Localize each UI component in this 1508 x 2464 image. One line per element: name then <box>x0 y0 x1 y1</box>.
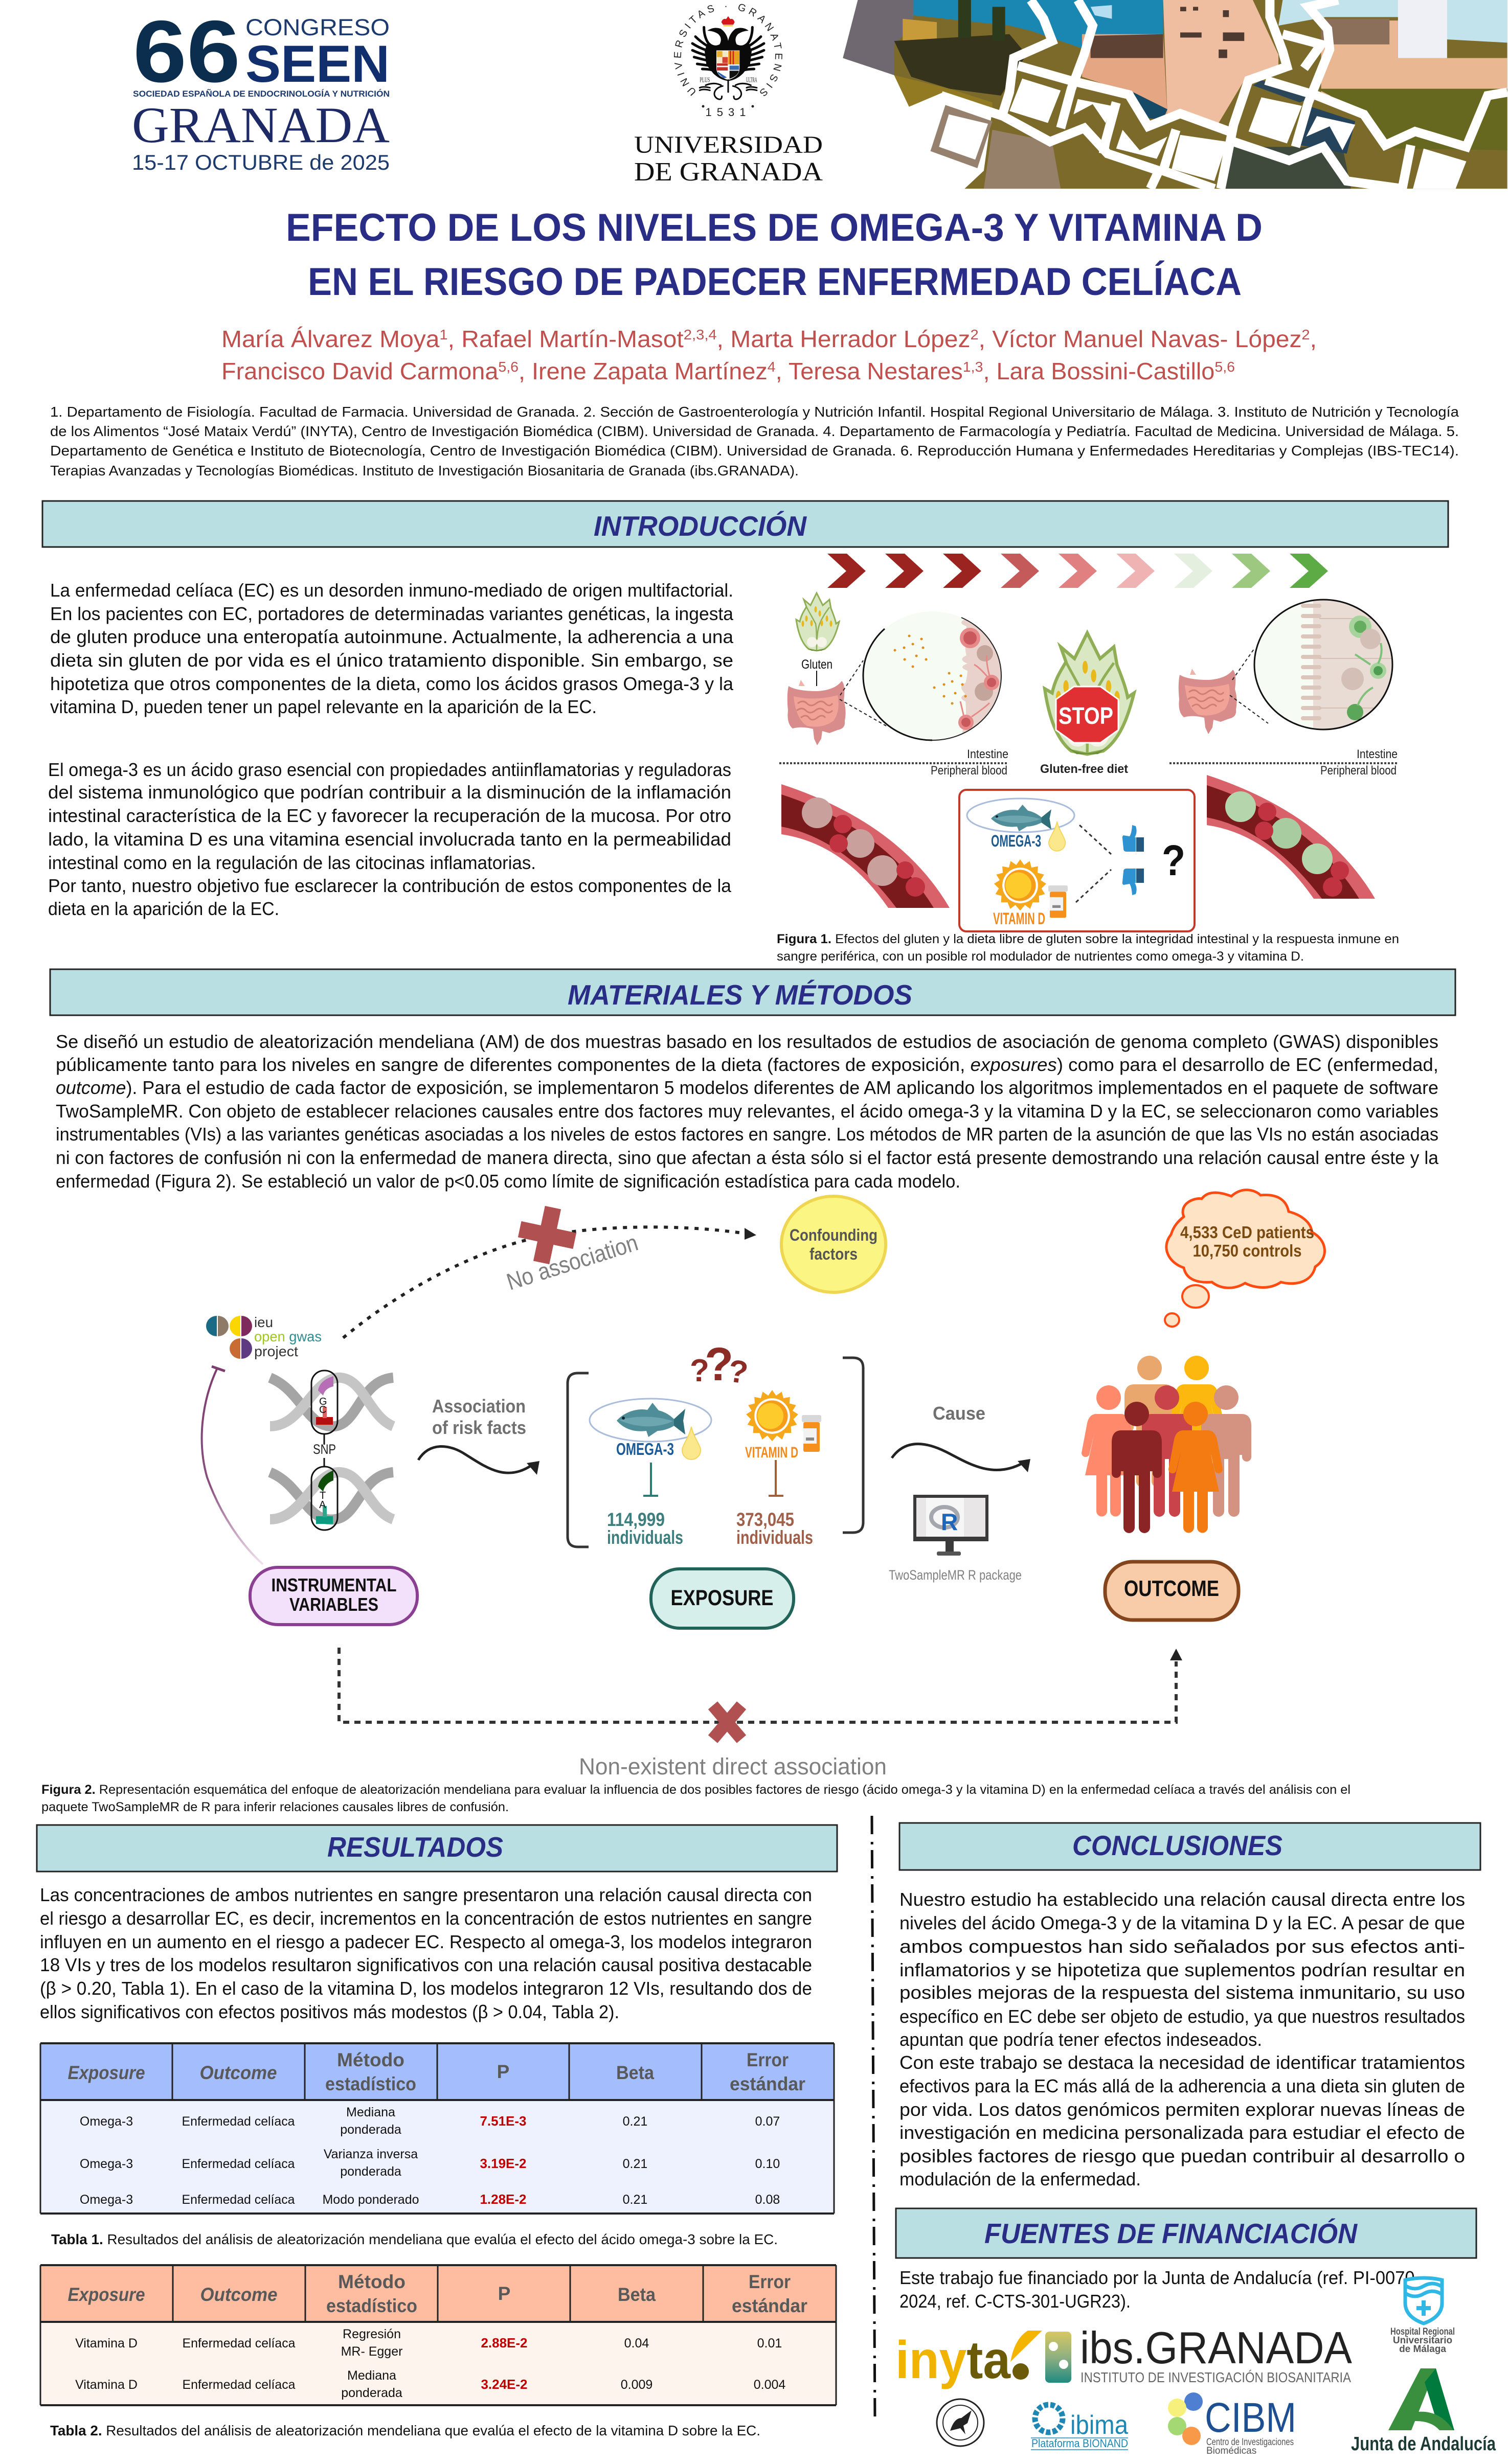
text: introducción paragraph 1: La enfermedad celíaca (EC) es un desorden inmuno-mediado de origen multifactorial. <box>50 580 733 601</box>
text: introducción paragraph 2: lado, la vitamina D es una vitamina esencial involucrada tanto en la permeabilidad <box>48 829 731 850</box>
callout: sample size cloud <box>1165 1190 1324 1327</box>
pill: instrumental variables <box>250 1567 417 1625</box>
text: introducción paragraph 1: En los pacientes con EC, portadores de determinadas variantes genéticas, la ingesta <box>50 603 734 624</box>
table 2: vitamina d: Error <box>749 2271 791 2292</box>
header image: Alhambra collage <box>843 0 1507 189</box>
arrow: non-existent direct association <box>339 1648 1182 1722</box>
authors: , Rafael Martín-Masot <box>448 326 684 352</box>
icon: fish omega-3 <box>590 1399 711 1459</box>
question marks <box>690 1338 750 1391</box>
logo: inyta: inyta <box>895 2331 1011 2390</box>
text: conclusiones: inflamatorios y se hipotetiza que suplementos podrían resultar en <box>899 1959 1465 1980</box>
logo: ibima plataforma bionand: Plataforma BIONAND <box>1031 2437 1128 2450</box>
bracket: exposure left <box>568 1373 589 1547</box>
authors: 4 <box>768 359 776 375</box>
table 2: vitamina d: P <box>498 2283 510 2304</box>
icon: dna snp G C <box>270 1371 393 1434</box>
icon: dna snp T A: T <box>320 1490 326 1501</box>
logo: 66 congreso SEEN Granada: CONGRESO <box>245 14 390 40</box>
callout: sample size cloud: 10,750 controls <box>1192 1241 1302 1260</box>
table 1: omega-3: Método <box>337 2049 404 2070</box>
pill: outcome <box>1105 1562 1239 1620</box>
caption: figura 2 <box>41 1783 1351 1814</box>
text: introducción paragraph 1: vitamina D, pueden tener un papel relevante en la aparición de la EC. <box>50 696 597 717</box>
question marks: ? <box>705 1338 733 1390</box>
authors: , Teresa Nestares <box>776 358 963 384</box>
figure 1: gluten diagram <box>779 554 1400 931</box>
figure 2: mendelian randomization diagram <box>202 1190 1324 1779</box>
text: conclusiones: Nuestro estudio ha establecido una relación causal directa entre los <box>899 1889 1465 1910</box>
table 2: vitamina d: Outcome <box>200 2284 277 2305</box>
text: introducción paragraph 1: dieta sin gluten de por vida es el único tratamiento disponible. Sin embargo, se <box>50 650 733 671</box>
logo: 66 congreso SEEN Granada <box>132 3 390 174</box>
table 1: omega-3: estadístico <box>325 2073 416 2094</box>
arrow: no association dashed curve <box>343 1227 756 1338</box>
text: conclusiones: efectivos para la EC más allá de la adherencia a una dieta sin gluten de <box>899 2075 1465 2096</box>
table 1: omega-3: Omega-3 <box>80 2114 133 2129</box>
logo: cibm: Centro de Investigaciones <box>1206 2437 1294 2448</box>
text: financiación <box>899 2267 1421 2312</box>
table 1: omega-3: Modo ponderado <box>322 2193 419 2207</box>
question mark: ? <box>1162 836 1185 884</box>
zoom: inflamed intestine wall <box>840 611 1007 741</box>
logo: Universidad de Granada <box>634 4 823 187</box>
logo: cibm <box>1168 2392 1296 2456</box>
text: resultados <box>40 1884 812 2022</box>
logo: cibm: Biomédicas <box>1206 2446 1256 2456</box>
text: conclusiones: por vida. Los datos genómicos permiten explorar nuevas líneas de <box>899 2099 1465 2120</box>
text: conclusiones: Con este trabajo se destaca la necesidad de identificar tratamientos <box>899 2052 1465 2073</box>
icon: dna snp G C: G <box>319 1396 327 1407</box>
table 1: omega-3: 0.21 <box>623 2193 647 2207</box>
pill: instrumental variables: VARIABLES <box>289 1594 378 1615</box>
icon: monitor with R: R <box>941 1509 958 1535</box>
caption: figura 1 <box>777 932 1399 964</box>
text: materiales y métodos: enfermedad (Figura 2). Se estableció un valor de p<0.05 como límite de significación estadística para cada modelo. <box>56 1171 960 1192</box>
callout: confounding factors: factors <box>809 1245 858 1263</box>
logo: Universidad de Granada: ULTRA <box>746 76 757 84</box>
text: materiales y métodos: outcome). Para el estudio de cada factor de exposición, se implementaron 5 modelos diferentes de AM aplicando los algoritmos implementados en el paquete de software <box>56 1077 1438 1098</box>
table 2: vitamina d: Vitamina D <box>75 2336 138 2351</box>
text: conclusiones: ambos compuestos han sido señalados por sus efectos anti- <box>899 1936 1465 1957</box>
table 2: vitamina d: Exposure <box>67 2284 145 2305</box>
divider and labels: intestine vs peripheral blood: Intestine <box>967 747 1008 761</box>
callout: sample size cloud: 4,533 CeD patients <box>1180 1223 1314 1242</box>
text: introducción paragraph 1: de gluten produce una enteropatía autoinmune. Actualmente, la adherencia a una <box>50 626 734 647</box>
table 1: omega-3: P <box>497 2061 509 2082</box>
text: financiación: 2024, ref. C-CTS-301-UGR23). <box>899 2291 1131 2312</box>
label: association of risk facts: of risk facts <box>432 1417 526 1438</box>
icon: red cross <box>713 1705 741 1739</box>
pill: outcome: OUTCOME <box>1124 1576 1219 1601</box>
logo: Universidad de Granada: DE GRANADA <box>634 157 823 187</box>
table 2: vitamina d: ponderada <box>341 2386 402 2400</box>
text: resultados: (β > 0.20, Tabla 1). En el caso de la vitamina D, los modelos integraron 12 VIs, resultando dos de <box>40 1978 812 1999</box>
table 1: omega-3: Error <box>747 2049 789 2070</box>
table 1: omega-3: 0.10 <box>755 2157 780 2171</box>
text: introducción paragraph 2: dieta en la aparición de la EC. <box>48 898 279 919</box>
icon: pill bottle <box>1048 885 1068 918</box>
table 2: vitamina d: estadístico <box>326 2295 417 2316</box>
icon: sun vitamin d <box>746 1390 798 1441</box>
authors: 5,6 <box>1214 359 1235 375</box>
pill: instrumental variables: INSTRUMENTAL <box>271 1575 397 1595</box>
table 1: omega-3: Enfermedad celíaca <box>182 2157 295 2171</box>
text: introducción paragraph 1: hipotetiza que otros componentes de la dieta, como los ácidos grasos Omega-3 y la <box>50 673 734 694</box>
icon: dna snp T A <box>270 1467 393 1530</box>
table 1: omega-3: estándar <box>730 2073 805 2094</box>
table 2: vitamina d: MR- Egger <box>341 2344 402 2359</box>
affiliations: Terapias Avanzadas y Tecnologías Biomédicas. Instituto de Investigación Biosanitaria de Granada (ibs.GRANADA). <box>50 463 799 478</box>
table 2: vitamina d: 0.04 <box>624 2336 649 2351</box>
text: resultados: ellos significativos con efectos positivos más modestos (β > 0.04, Tabla 2). <box>40 2001 619 2022</box>
table 2: vitamina d: Enfermedad celíaca <box>182 2378 296 2392</box>
text: materiales y métodos: instrumentables (VIs) a las variantes genéticas asociadas a los niveles de estos factores en sangre. Los métodos de MR parten de la asunción de que las VIs no están asociadas <box>56 1124 1438 1145</box>
label: snp: SNP <box>313 1442 336 1457</box>
table 1: omega-3: Outcome <box>199 2062 277 2083</box>
label: vitamin d individuals <box>736 1509 813 1548</box>
callout: confounding factors <box>781 1196 886 1292</box>
table 2: vitamina d: Mediana <box>347 2368 396 2383</box>
logo: ibs granada: ibs.GRANADA <box>1080 2322 1352 2373</box>
label: vitamin d: VITAMIN D <box>993 909 1045 928</box>
heading: introducción: INTRODUCCIÓN <box>594 510 807 542</box>
heading: resultados: RESULTADOS <box>327 1831 503 1863</box>
label: association of risk facts <box>432 1396 526 1438</box>
text: materiales y métodos: ni con factores de confusión ni con la enfermedad de manera directa, sino que afectan a ésta sólo si el factor está presente demostrando una relación causal entre éste y la <box>56 1147 1439 1168</box>
icon: gluten plant <box>796 593 839 651</box>
text: materiales y métodos: públicamente tanto para los niveles en sangre de diferentes componentes de la dieta (factores de exposición, exposures) como para el desarrollo de EC (enfermedad, <box>56 1054 1438 1075</box>
icon: healthy blood vessel <box>1207 775 1375 899</box>
label: omega-3 individuals: 114,999 <box>607 1509 665 1530</box>
label: snp <box>313 1434 336 1466</box>
question marks: ? <box>726 1353 750 1391</box>
affiliations: 1. Departamento de Fisiología. Facultad de Farmacia. Universidad de Granada. 2. Sección de Gastroenterología y Nutrición Infantil. Hospital Regional Universitario de Málaga. 3. Instituto de Nutrición y Tecnología <box>50 404 1459 420</box>
text: introducción paragraph 1 <box>50 580 734 717</box>
logo: ieu open gwas project: ieu <box>254 1314 273 1330</box>
text: conclusiones: apuntan que podría tener efectos indeseados. <box>899 2029 1262 2050</box>
text: conclusiones <box>899 1889 1465 2189</box>
table 1: omega-3: Omega-3 <box>80 2193 133 2207</box>
label: cause: Cause <box>933 1403 985 1424</box>
divider and labels: intestine vs peripheral blood <box>779 747 1399 778</box>
caption: figura 2: Figura 2. Representación esquemática del enfoque de aleatorización mendeliana para evaluar la influencia de dos posibles factores de riesgo (ácido omega-3 y la vitamina D) en la enfermedad celíaca a través del análisis con el <box>41 1783 1351 1797</box>
logo: Universidad de Granada: UNIVERSITAS · GRANATENSIS <box>674 4 782 96</box>
text: resultados: 18 VIs y tres de los modelos resultaron significativos con una relación causal positiva destacable <box>40 1954 812 1975</box>
table 1: omega-3: Beta <box>616 2062 654 2083</box>
icon: thumbs down <box>1122 869 1144 895</box>
authors: , Víctor Manuel Navas- López <box>979 326 1301 352</box>
icon: sun vitamin d <box>994 859 1046 910</box>
caption: tabla 1: Tabla 1. Resultados del análisis de aleatorización mendeliana que evalúa el efecto del ácido omega-3 sobre la EC. <box>51 2231 778 2247</box>
divider and labels: intestine vs peripheral blood: Peripheral blood <box>1320 764 1397 778</box>
authors: 2 <box>1301 327 1310 343</box>
tee line: vitamin d sample <box>769 1460 783 1496</box>
table 1: omega-3: 3.19E-2 <box>480 2156 527 2171</box>
table 2: vitamina d: 0.01 <box>757 2336 782 2351</box>
table 1: omega-3: ponderada <box>340 2164 401 2179</box>
authors: Francisco David Carmona <box>221 358 493 384</box>
authors: , Irene Zapata Martínez <box>519 358 768 384</box>
logo: instituto de biotecnología seal <box>937 2399 984 2446</box>
affiliations: Departamento de Genética e Instituto de Biotecnología, Centro de Investigación Biomédica (CIBM). Universidad de Granada. 6. Reproducción Humana y Enfermedades Hereditarias y Complejas (IBS-TEC14). <box>50 443 1459 459</box>
table 2: vitamina d: Beta <box>618 2284 656 2305</box>
logo: Universidad de Granada: PLUS <box>700 76 710 84</box>
text: financiación: Este trabajo fue financiado por la Junta de Andalucía (ref. PI-0070- <box>899 2267 1421 2288</box>
table 1: omega-3: 0.07 <box>755 2114 780 2129</box>
logo: 66 congreso SEEN Granada: 66 <box>133 3 240 101</box>
logo: ibima plataforma bionand: ibima <box>1070 2410 1128 2440</box>
icon: gluten-free plant with stop sign: STOP <box>1059 702 1113 729</box>
icon: inflamed intestine <box>787 671 846 745</box>
arrow: wave to outcome <box>892 1444 1030 1472</box>
tee line: omega-3 sample <box>643 1463 658 1496</box>
logo: Universidad de Granada: UNIVERSIDAD <box>634 131 823 158</box>
icon: group of people <box>1082 1356 1251 1533</box>
table 1: omega-3: 7.51E-3 <box>480 2113 527 2129</box>
text: materiales y métodos: Se diseñó un estudio de aleatorización mendeliana (AM) de dos muestras basado en los resultados de estudios de asociación de genoma completo (GWAS) disponibles <box>56 1031 1438 1052</box>
pill: exposure: EXPOSURE <box>671 1586 773 1610</box>
label: omega-3 individuals <box>607 1509 683 1548</box>
logo: cibm: CIBM <box>1205 2394 1296 2441</box>
caption: tabla 2: Tabla 2. Resultados del análisis de aleatorización mendeliana que evalúa el efecto de la vitamina D sobre la EC. <box>50 2423 760 2438</box>
text: introducción paragraph 2: intestinal característica de la EC y favorecer la recuperación de la mucosa. Por otro <box>48 805 731 826</box>
icon: gluten-free plant with stop sign <box>1045 633 1134 754</box>
authors <box>221 326 1317 384</box>
text: introducción paragraph 2: Por tanto, nuestro objetivo fue esclarecer la contribución de estos componentes de la <box>48 875 732 896</box>
pill: exposure <box>651 1569 794 1628</box>
table 2: vitamina d: estándar <box>732 2295 807 2316</box>
panel: nutrient box <box>959 790 1195 931</box>
authors: 1 <box>439 327 448 343</box>
bracket: exposure right <box>843 1358 863 1533</box>
logo: ieu open gwas project: project <box>254 1343 298 1359</box>
logo: ibima plataforma bionand <box>1031 2405 1128 2450</box>
table 2: vitamina d: 0.009 <box>621 2378 652 2392</box>
heading: conclusiones <box>899 1823 1480 1870</box>
logo: hospital regional universitario de málaga <box>1390 2278 1455 2355</box>
text: conclusiones: niveles del ácido Omega-3 y de la vitamina D y la EC. A pesar de que <box>899 1912 1465 1933</box>
table 2: vitamina d: Vitamina D <box>75 2378 138 2392</box>
logo: ibs granada <box>1045 2322 1352 2385</box>
authors: 5,6 <box>498 359 519 375</box>
label: non-existent direct association: Non-existent direct association <box>579 1753 887 1779</box>
icon: monitor with R <box>913 1495 988 1556</box>
table 1: omega-3: Enfermedad celíaca <box>182 2193 295 2207</box>
affiliations <box>50 404 1459 478</box>
icon: inflamed blood vessel <box>781 784 950 908</box>
heading: conclusiones: CONCLUSIONES <box>1072 1830 1282 1861</box>
logo: 66 congreso SEEN Granada: GRANADA <box>132 97 390 153</box>
text: introducción paragraph 2: El omega-3 es un ácido graso esencial con propiedades antiinflamatorias y reguladoras <box>48 759 731 780</box>
logo: ieu open gwas project: open gwas <box>254 1329 322 1344</box>
table 1: omega-3: Enfermedad celíaca <box>182 2114 295 2129</box>
table 1: omega-3: Varianza inversa <box>324 2147 418 2161</box>
text: materiales y métodos <box>56 1031 1439 1192</box>
heading: materiales y métodos: MATERIALES Y MÉTODOS <box>568 979 912 1011</box>
table 1: omega-3: 0.21 <box>623 2157 647 2171</box>
icon: red cross <box>514 1202 580 1268</box>
text: introducción paragraph 2: del sistema inmunológico que podrían contribuir a la disminución de la inflamación <box>48 782 731 803</box>
heading: resultados <box>37 1825 837 1872</box>
table 2: vitamina d <box>40 2265 836 2405</box>
table 2: vitamina d: 3.24E-2 <box>481 2377 528 2392</box>
table 1: omega-3: 1.28E-2 <box>480 2192 527 2207</box>
logo: 66 congreso SEEN Granada: SEEN <box>245 35 390 93</box>
authors: , Marta Herrador López <box>717 326 970 352</box>
label: omega-3: OMEGA-3 <box>991 832 1041 850</box>
table 1: omega-3: 0.21 <box>623 2114 647 2129</box>
authors: 1,3 <box>963 359 983 375</box>
caption: figura 1: Figura 1. Efectos del gluten y la dieta libre de gluten sobre la integridad intestinal y la respuesta inmune en <box>777 932 1399 946</box>
table 1: omega-3: Exposure <box>67 2062 145 2083</box>
logo: 66 congreso SEEN Granada: 15-17 OCTUBRE de 2025 <box>132 150 390 174</box>
caption: figura 2: paquete TwoSampleMR de R para inferir relaciones causales libres de confusión. <box>41 1800 509 1814</box>
label: no association: No association <box>503 1229 641 1295</box>
table 1: omega-3 <box>40 2043 834 2214</box>
table 2: vitamina d: Enfermedad celíaca <box>182 2336 296 2351</box>
arrow: purple inhibition <box>202 1366 263 1564</box>
icon: healthy intestine <box>1179 669 1237 734</box>
chevron arrows <box>827 554 1328 588</box>
text: conclusiones: posibles factores de riesgo que puedan contribuir al desarrollo o <box>899 2146 1465 2166</box>
logo: hospital regional universitario de málaga: Hospital Regional <box>1390 2326 1455 2337</box>
authors: 2 <box>970 327 979 343</box>
title: EN EL RIESGO DE PADECER ENFERMEDAD CELÍACA <box>308 260 1242 304</box>
divider and labels: intestine vs peripheral blood: Gluten-free diet <box>1040 762 1128 776</box>
logo: 66 congreso SEEN Granada: SOCIEDAD ESPAÑOLA DE ENDOCRINOLOGÍA Y NUTRICIÓN <box>133 88 390 99</box>
label: omega-3 individuals: individuals <box>607 1527 683 1548</box>
text: conclusiones: modulación de la enfermedad. <box>899 2169 1141 2189</box>
label: vitamin d individuals: 373,045 <box>736 1509 794 1530</box>
table 2: vitamina d: 2.88E-2 <box>481 2335 528 2351</box>
table 2: vitamina d: Regresión <box>343 2327 401 2341</box>
question marks: ? <box>690 1353 709 1388</box>
icon: dna snp G C: C <box>319 1404 326 1416</box>
heading: fuentes de financiación: FUENTES DE FINANCIACIÓN <box>984 2218 1358 2249</box>
caption: figura 1: sangre periférica, con un posible rol modulador de nutrientes como omega-3 y vitamina D. <box>777 949 1304 964</box>
heading: fuentes de financiación <box>896 2208 1476 2258</box>
logo: Universidad de Granada: 1531 <box>706 106 751 119</box>
text: materiales y métodos: TwoSampleMR. Con objeto de establecer relaciones causales entre dos factores muy relevantes, el ácido omega-3 y la vitamina D y la EC, se seleccionaron como variables <box>56 1101 1438 1122</box>
table 1: omega-3: 0.08 <box>755 2193 780 2207</box>
label: vitamin d individuals: individuals <box>736 1527 813 1548</box>
logo: hospital regional universitario de málaga: de Málaga <box>1399 2344 1446 2355</box>
callout: confounding factors: Confounding <box>790 1226 877 1244</box>
zoom: healthy intestine wall <box>1230 598 1400 731</box>
label: omega-3: OMEGA-3 <box>616 1440 674 1458</box>
heading: introducción <box>42 501 1448 547</box>
authors: , <box>1310 326 1317 352</box>
table 2: vitamina d: Método <box>338 2271 406 2292</box>
title <box>286 206 1263 304</box>
label: twosamplemr: TwoSampleMR R package <box>889 1567 1022 1583</box>
text: conclusiones: específico en EC debe ser objeto de estudio, ya que nuestros resultados <box>899 2006 1465 2027</box>
divider and labels: intestine vs peripheral blood: Intestine <box>1357 747 1398 761</box>
table 1: omega-3: Mediana <box>346 2105 395 2119</box>
text: conclusiones: posibles mejoras de la respuesta del sistema inmunitario, su uso <box>899 1982 1465 2003</box>
text: introducción paragraph 2: intestinal como en la regulación de las citocinas inflamatorias. <box>48 852 536 873</box>
table 2: vitamina d: 0.004 <box>754 2378 785 2392</box>
icon: fish omega-3 <box>967 798 1074 851</box>
authors: María Álvarez Moya <box>221 326 431 352</box>
authors: , Lara Bossini-Castillo <box>983 358 1214 384</box>
affiliations: de los Alimentos “José Mataix Verdú” (INYTA), Centro de Investigación Biomédica (CIBM). Universidad de Granada. 4. Departamento de Farmacología y Pediatría. Facultad de Medicina. Universidad de Málaga. 5. <box>50 423 1459 439</box>
logo: hospital regional universitario de málaga: Universitario <box>1393 2335 1452 2346</box>
logo: ibs granada: INSTITUTO DE INVESTIGACIÓN BIOSANITARIA <box>1081 2369 1351 2385</box>
table 1: omega-3: Omega-3 <box>80 2157 133 2171</box>
authors: 2,3,4 <box>684 327 717 343</box>
label: vitamin d: VITAMIN D <box>745 1444 798 1461</box>
icon: thumbs up <box>1122 825 1144 852</box>
divider and labels: intestine vs peripheral blood: Peripheral blood <box>931 764 1007 778</box>
icon: pill bottle <box>802 1415 821 1452</box>
title: EFECTO DE LOS NIVELES DE OMEGA-3 Y VITAMINA D <box>286 206 1263 249</box>
text: resultados: el riesgo a desarrollar EC, es decir, incrementos en la concentración de estos nutrientes en sangre <box>40 1908 812 1929</box>
logo: junta de andalucía <box>1351 2368 1496 2455</box>
icon: dna snp T A: A <box>319 1499 326 1511</box>
logo: ieu open gwas project <box>206 1314 322 1359</box>
text: resultados: Las concentraciones de ambos nutrientes en sangre presentaron una relación causal directa con <box>40 1884 812 1905</box>
table 1: omega-3: ponderada <box>340 2123 401 2137</box>
text: introducción paragraph 2 <box>48 759 732 919</box>
text: resultados: influyen en un aumento en el riesgo a padecer EC. Respecto al omega-3, los modelos integraron <box>40 1931 812 1952</box>
heading: materiales y métodos <box>50 969 1455 1015</box>
label: association of risk facts: Association <box>432 1396 526 1417</box>
label: gluten: Gluten <box>801 657 832 672</box>
text: conclusiones: investigación en medicina personalizada para estudiar el efecto de <box>899 2122 1465 2143</box>
arrow: wave to exposure <box>418 1446 539 1475</box>
